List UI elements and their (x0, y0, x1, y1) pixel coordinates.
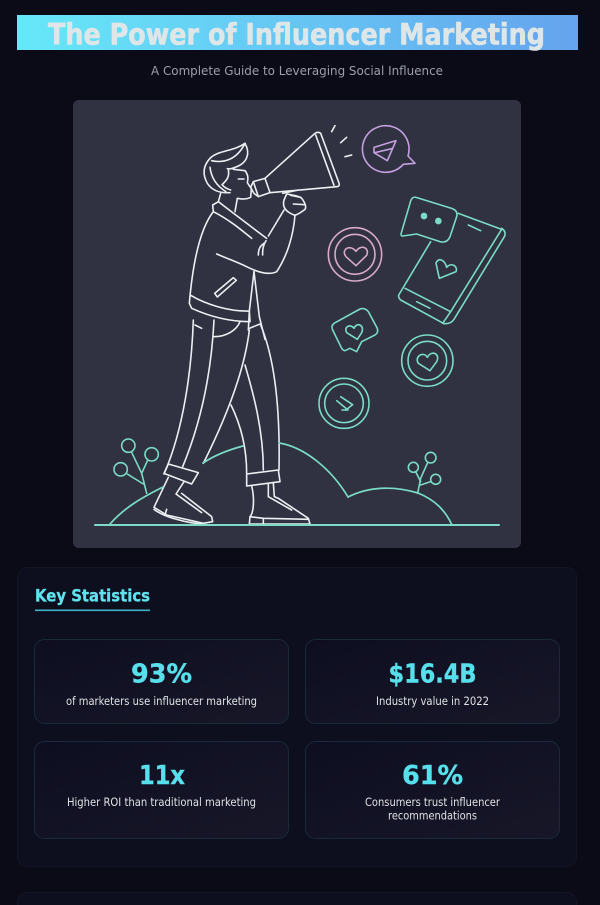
stat card: 11x: Higher ROI than traditional marketing (67, 795, 256, 809)
icon: pink heart coin (328, 228, 382, 281)
icon: send bubble (362, 126, 415, 172)
icon: teal arrow coin (319, 378, 369, 428)
panel: key statistics (18, 568, 576, 866)
stat card: 61%: 61% (402, 761, 463, 791)
icon: phone with chat bubble (399, 197, 505, 324)
title: The Power of Influencer Marketing (48, 18, 545, 52)
icon: teal heart coin (402, 335, 453, 386)
icons group (319, 126, 505, 428)
ground and hills (95, 443, 499, 525)
stat card: 11x (34, 742, 288, 838)
stat card: 61%: recommendations (388, 808, 477, 822)
figure: man upper body with megaphone (189, 126, 352, 339)
stat card: 61% (306, 742, 560, 838)
stat card: 61%: Consumers trust influencer (365, 795, 500, 809)
panel: next section (cropped) (18, 892, 576, 905)
stat card: $16.4B: Industry value in 2022 (376, 694, 489, 708)
stat card: 93%: of marketers use influencer marketing (66, 694, 257, 708)
hand (283, 190, 306, 215)
stat card: 93% (34, 640, 288, 724)
stat card: 11x: 11x (139, 761, 185, 791)
heading: key statistics: Key Statistics (35, 586, 150, 606)
icon: small heart bubble (332, 309, 378, 352)
subtitle: A Complete Guide to Leveraging Social Influence (151, 63, 443, 78)
stat card: $16.4B (306, 640, 560, 724)
figure: man legs and shoes (154, 320, 310, 524)
plant: right (408, 452, 441, 493)
head and hair (204, 143, 251, 212)
stat card: 93%: 93% (131, 660, 192, 690)
icon: megaphone (251, 126, 352, 197)
panel: illustration (73, 100, 521, 548)
stat card: $16.4B: $16.4B (388, 660, 476, 690)
plant: left (114, 439, 158, 493)
jacket (189, 202, 295, 339)
